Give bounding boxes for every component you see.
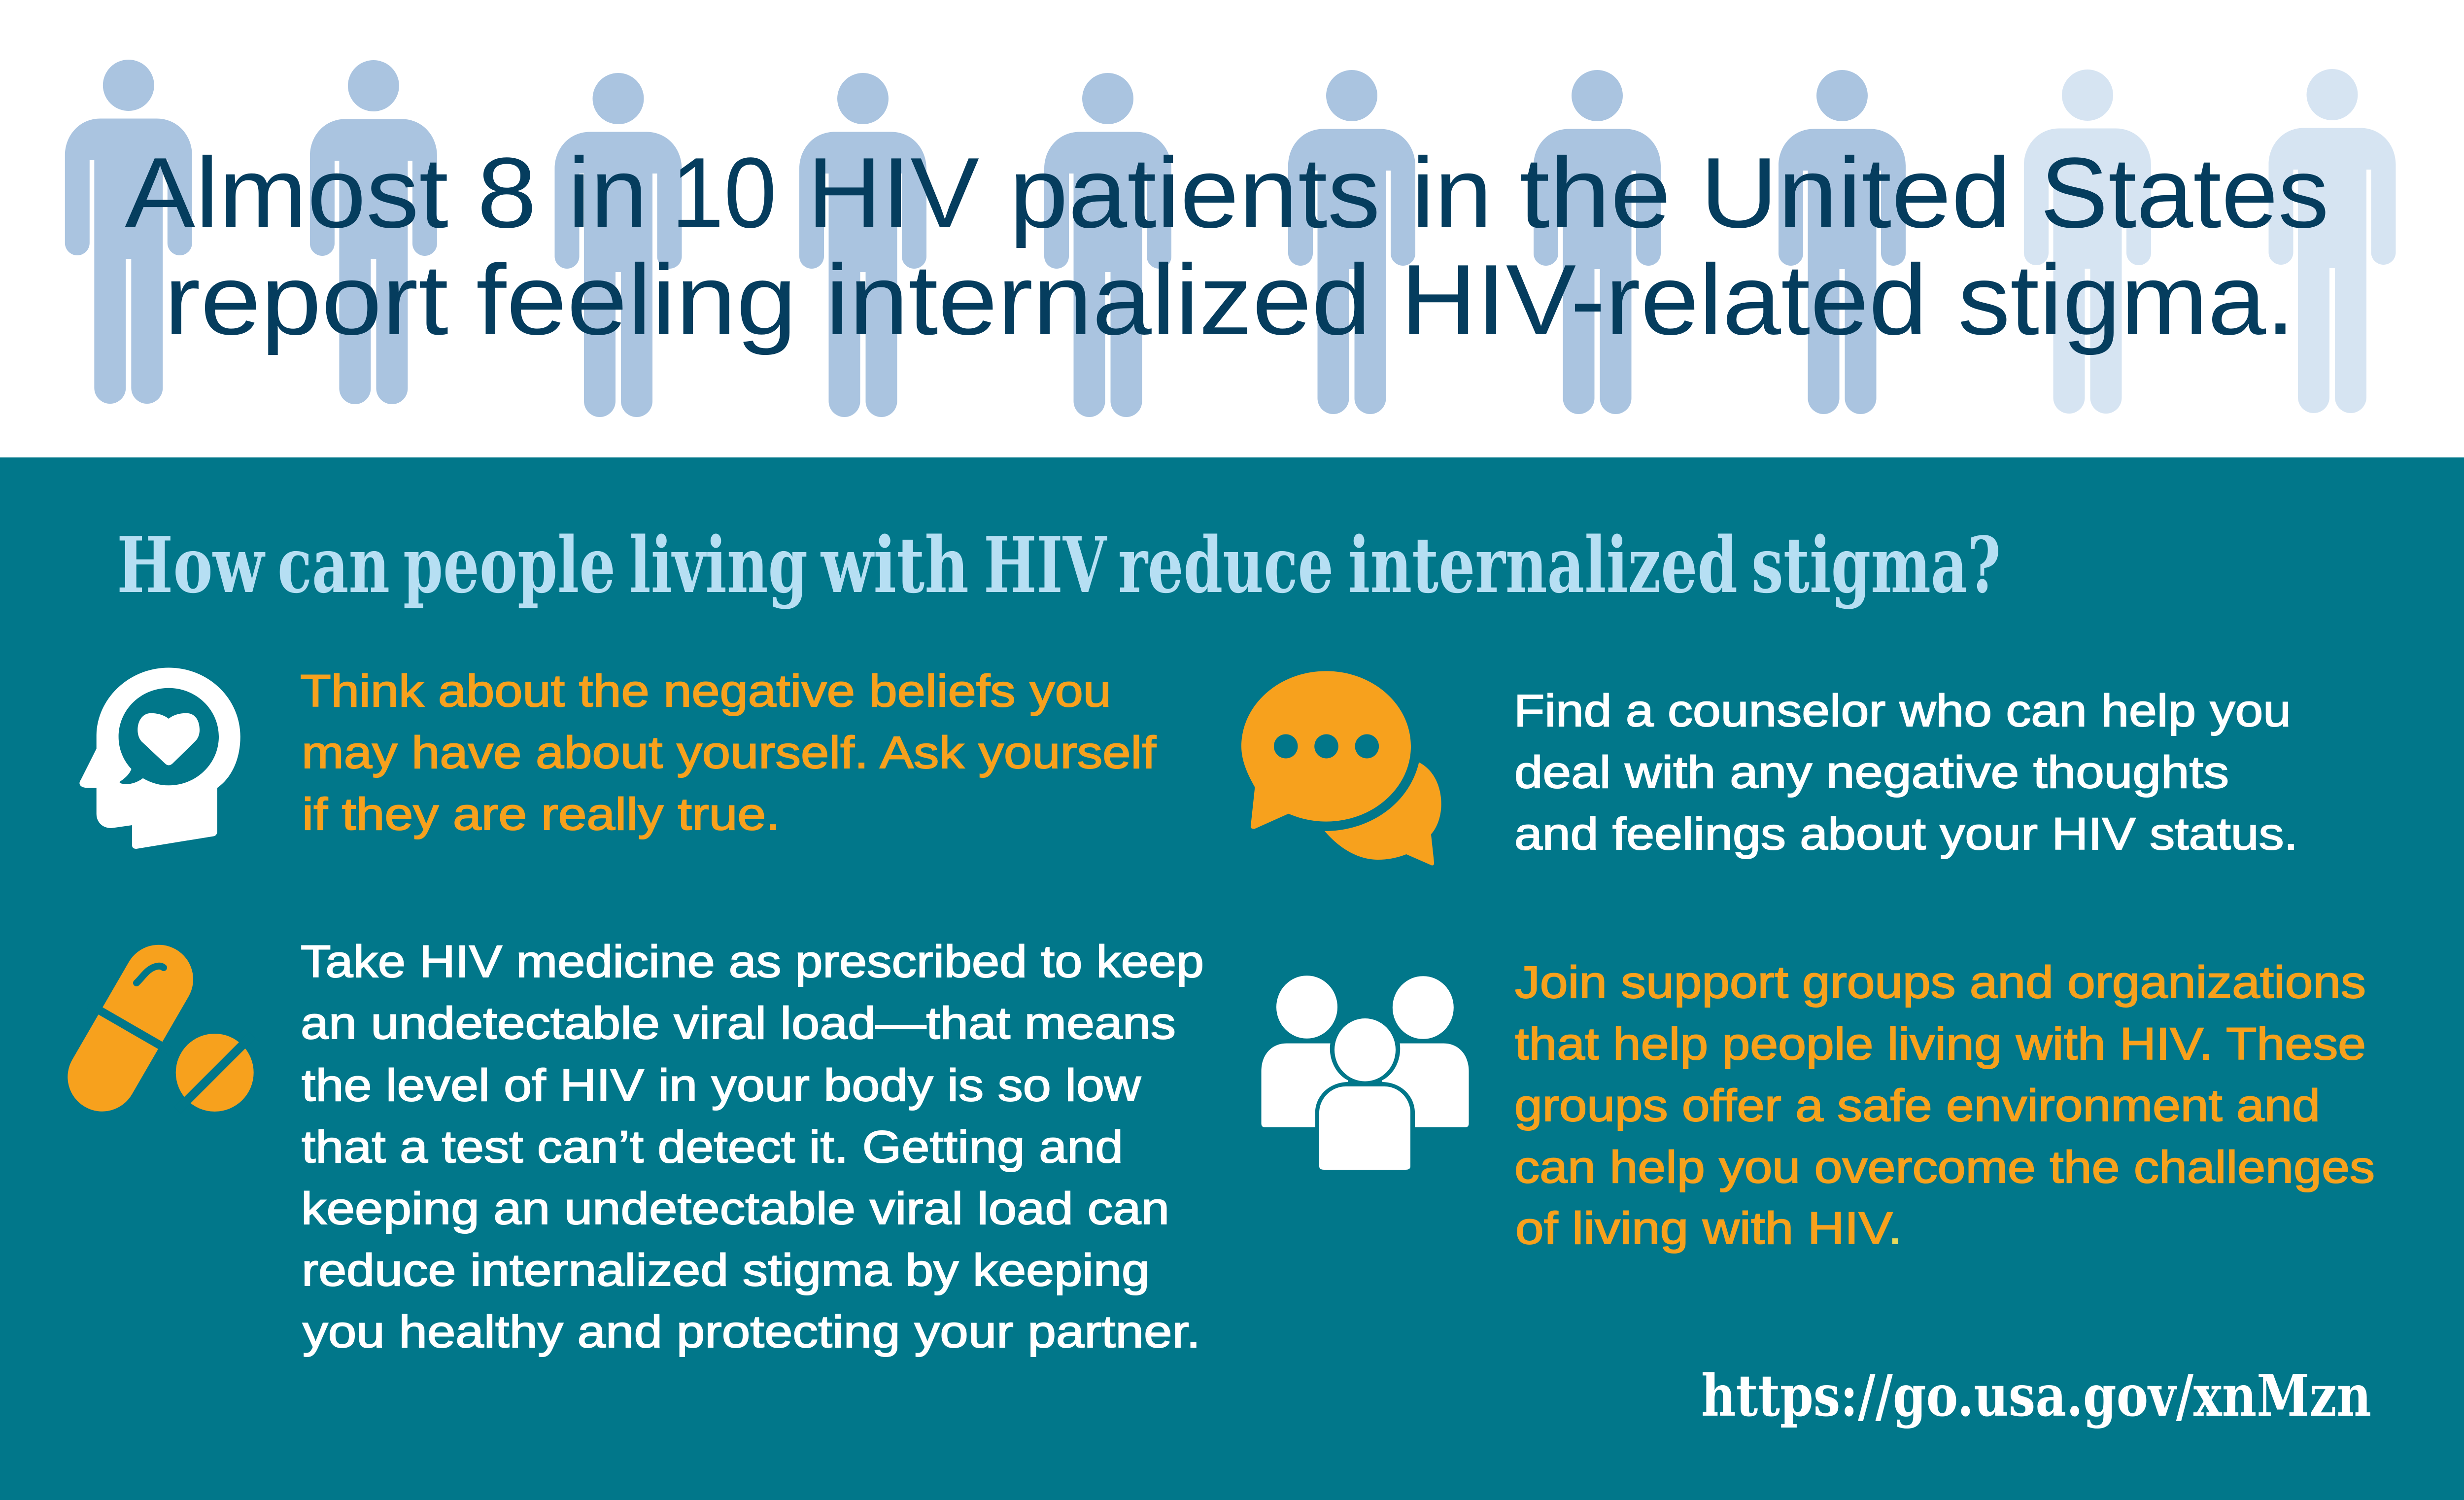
text: take HIV medicine: keeping an undetectable viral load can	[301, 1184, 1169, 1234]
title: the	[1519, 137, 1671, 249]
text: take HIV medicine: the level of HIV in your body is so low	[302, 1060, 1141, 1111]
text: think about negative beliefs: may have about yourself. Ask yourself	[302, 728, 1156, 778]
title: States	[2040, 137, 2329, 249]
panel: teal body background	[0, 457, 2464, 1500]
text: take HIV medicine	[301, 937, 1204, 1357]
heading: How	[117, 520, 266, 610]
person 9 (light)	[2024, 70, 2151, 414]
text: take HIV medicine: reduce internalized stigma by keeping	[302, 1245, 1150, 1295]
person 5	[1044, 73, 1171, 417]
title: report	[164, 244, 448, 356]
heading: internalized	[1348, 520, 1738, 610]
title: feeling	[476, 244, 797, 356]
title: 10	[671, 137, 777, 249]
text: join support groups: can help you overcome the challenges	[1514, 1142, 2375, 1192]
text: join support groups: Join support groups and organizations	[1515, 957, 2366, 1008]
text: take HIV medicine: you healthy and protecting your partner.	[303, 1307, 1200, 1357]
title: HIV-related	[1401, 244, 1927, 356]
text: join support groups	[1514, 957, 2375, 1254]
text: take HIV medicine: Take HIV medicine as prescribed to keep	[301, 937, 1204, 987]
person 4	[799, 73, 926, 417]
person 6	[1288, 70, 1415, 414]
icon: capsule and tablet	[89, 966, 254, 1112]
heading: people	[403, 520, 616, 610]
icon: group of three people	[1262, 976, 1469, 1170]
text: find a counselor: Find a counselor who can help you	[1514, 686, 2291, 736]
heading	[117, 520, 2001, 610]
title: HIV	[807, 137, 979, 249]
heading: HIV	[984, 520, 1107, 610]
person 8	[1779, 70, 1906, 414]
person 3	[555, 73, 682, 417]
person 1	[65, 60, 192, 404]
title: Almost	[125, 137, 448, 249]
text: find a counselor	[1514, 686, 2298, 859]
text: think about negative beliefs: if they are really true.	[302, 789, 780, 839]
row of ten people: eight dark, two light	[65, 60, 2396, 417]
text: find a counselor: and feelings about your HIV status.	[1514, 809, 2298, 859]
panel: white header background	[0, 0, 2464, 457]
text: think about negative beliefs: Think about the negative beliefs you	[300, 666, 1111, 716]
text: take HIV medicine: that a test can’t detect it. Getting and	[302, 1122, 1123, 1172]
title: stigma.	[1958, 244, 2295, 356]
heading: can	[277, 520, 390, 610]
title: 8	[477, 137, 537, 249]
title: patients	[1009, 137, 1380, 249]
icon: head with heart speech bubble	[79, 667, 240, 849]
text: find a counselor: deal with any negative thoughts	[1514, 747, 2229, 798]
title: in	[1411, 137, 1492, 249]
title	[125, 137, 2329, 356]
heading: living	[629, 520, 808, 610]
text: take HIV medicine: an undetectable viral load—that means	[301, 998, 1176, 1048]
heading: with	[820, 520, 969, 610]
heading: reduce	[1118, 520, 1334, 610]
title: United	[1700, 137, 2011, 249]
title: internalized	[825, 244, 1371, 356]
text: join support groups: of living with HIV .	[1515, 1203, 1902, 1254]
text: join support groups: groups offer a safe environment and	[1514, 1081, 2320, 1131]
title: in	[568, 137, 648, 249]
icon: speech bubbles	[1241, 671, 1441, 866]
text: join support groups: that help people living with HIV. These	[1515, 1019, 2366, 1069]
heading: stigma?	[1751, 520, 2001, 610]
person 7	[1534, 70, 1661, 414]
person 10 (light)	[2269, 69, 2396, 413]
person 2	[310, 60, 437, 404]
text: think about negative beliefs	[300, 666, 1156, 839]
